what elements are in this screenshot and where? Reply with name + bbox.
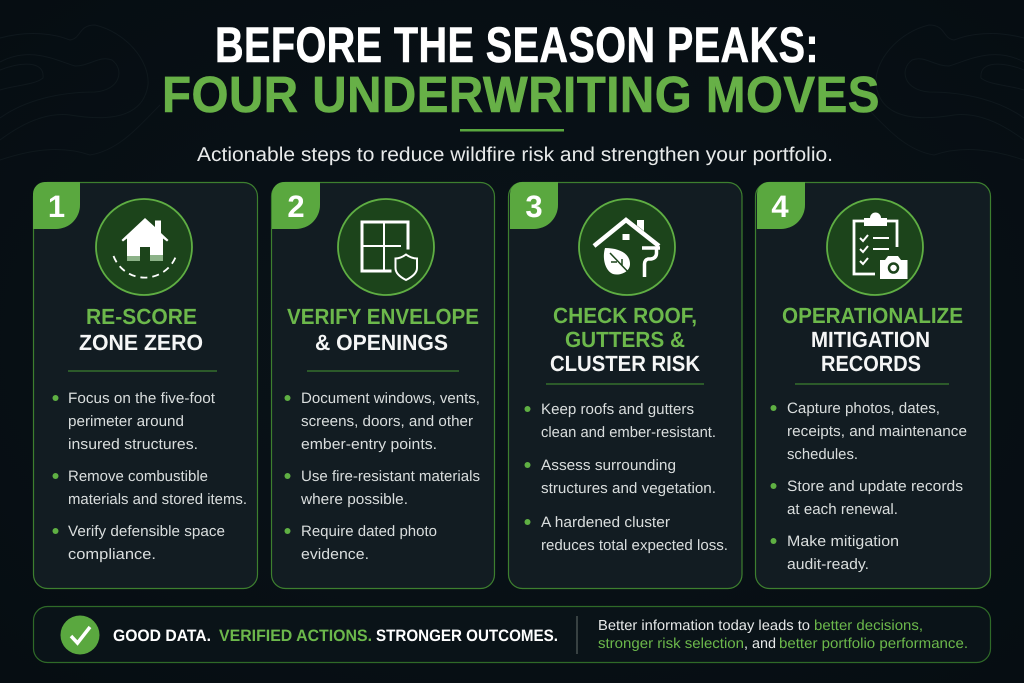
subtitle: Actionable steps to reduce wildfire risk and strengthen your portfolio. xyxy=(197,144,833,166)
step 3 bullets: Keep roofs and gutters xyxy=(541,401,694,418)
step 1 bullets: materials and stored items. xyxy=(68,491,247,508)
step 4 badge: 4 xyxy=(771,189,789,224)
step 3 bullets: reduces total expected loss. xyxy=(541,537,728,554)
icon: window with shield xyxy=(338,199,434,295)
step 2 heading xyxy=(287,304,479,355)
step 2 bullets: Use fire-resistant materials xyxy=(301,468,480,485)
step 4 bullets xyxy=(770,400,967,573)
step 2 heading: VERIFY ENVELOPE xyxy=(287,304,479,329)
step 4 heading: MITIGATION xyxy=(811,327,930,352)
step 1 heading: RE-SCORE xyxy=(86,304,197,329)
step 2 bullets: where possible. xyxy=(300,491,408,508)
step 2 bullets xyxy=(284,390,480,563)
footer message: stronger risk selection xyxy=(598,636,744,652)
step 2 badge: 2 xyxy=(287,189,305,224)
step 1 bullets: Verify defensible space xyxy=(68,523,225,540)
step 1 heading xyxy=(79,304,203,355)
step 3 badge xyxy=(510,182,558,229)
panel: step 3 xyxy=(508,182,742,588)
step 3 heading xyxy=(550,303,700,376)
footer message: Better information today leads to xyxy=(598,618,810,634)
step 3 heading: CHECK ROOF, xyxy=(553,303,697,328)
footer message xyxy=(598,618,968,652)
step 2 heading: & OPENINGS xyxy=(315,330,448,355)
step 2 bullets: evidence. xyxy=(301,546,369,563)
title rule xyxy=(460,129,564,132)
step 2 bullets: Document windows, vents, xyxy=(301,390,480,407)
icon: check badge xyxy=(60,616,100,654)
step 1 bullets: Remove combustible xyxy=(68,468,208,485)
step 4 heading xyxy=(782,303,963,376)
footer message: , and xyxy=(744,636,776,652)
step 4 bullets: Store and update records xyxy=(787,478,963,495)
step 1 bullets: compliance. xyxy=(68,546,156,563)
step 4 heading: RECORDS xyxy=(821,351,921,376)
icon: clipboard and camera xyxy=(827,199,923,295)
step 4 bullets: Make mitigation xyxy=(787,533,899,550)
panel: step 4 xyxy=(756,182,990,588)
step 1 badge: 1 xyxy=(48,189,65,224)
step 1 bullets: insured structures. xyxy=(68,436,198,453)
step 3 bullets: A hardened cluster xyxy=(541,514,670,531)
step 2 bullets: ember-entry points. xyxy=(301,436,437,453)
step 3 bullets: Assess surrounding xyxy=(541,457,676,474)
step 1 bullets: Focus on the five-foot xyxy=(68,390,216,407)
icon: house with perimeter xyxy=(96,199,192,295)
footer tagline: STRONGER OUTCOMES. xyxy=(376,627,558,645)
step 1 badge xyxy=(33,182,80,229)
step 4 heading: OPERATIONALIZE xyxy=(782,303,963,328)
footer tagline xyxy=(113,627,558,645)
step 4 badge xyxy=(757,182,805,229)
step 2 bullets: screens, doors, and other xyxy=(301,413,473,430)
step 1 bullets xyxy=(52,390,247,563)
footer tagline: VERIFIED ACTIONS. xyxy=(219,627,372,645)
step 3 heading: GUTTERS & xyxy=(565,327,685,352)
panel: step 1 xyxy=(33,182,258,588)
step 2 bullets: Require dated photo xyxy=(301,523,437,540)
icon: roof, gutter and leaf xyxy=(579,199,675,295)
step 1 heading: ZONE ZERO xyxy=(79,330,203,355)
title: BEFORE THE SEASON PEAKS: xyxy=(215,17,819,73)
panel: step 2 xyxy=(272,182,494,588)
step 3 badge: 3 xyxy=(525,189,543,224)
step 4 bullets: schedules. xyxy=(787,446,858,463)
step 2 badge xyxy=(272,182,320,229)
step 4 bullets: at each renewal. xyxy=(787,501,898,518)
title xyxy=(162,17,880,123)
step 4 bullets: audit-ready. xyxy=(787,556,869,573)
title: FOUR UNDERWRITING MOVES xyxy=(162,66,880,123)
step 3 bullets xyxy=(524,401,728,554)
step 4 bullets: Capture photos, dates, xyxy=(787,400,940,417)
footer message: better portfolio performance. xyxy=(779,636,968,652)
step 4 bullets: receipts, and maintenance xyxy=(787,423,967,440)
footer message: better decisions, xyxy=(814,618,923,634)
step 3 bullets: clean and ember-resistant. xyxy=(541,424,716,441)
step 3 heading: CLUSTER RISK xyxy=(550,351,700,376)
step 3 bullets: structures and vegetation. xyxy=(541,480,716,497)
footer tagline: GOOD DATA. xyxy=(113,627,211,645)
panel: footer banner xyxy=(34,606,990,662)
step 1 bullets: perimeter around xyxy=(68,413,184,430)
